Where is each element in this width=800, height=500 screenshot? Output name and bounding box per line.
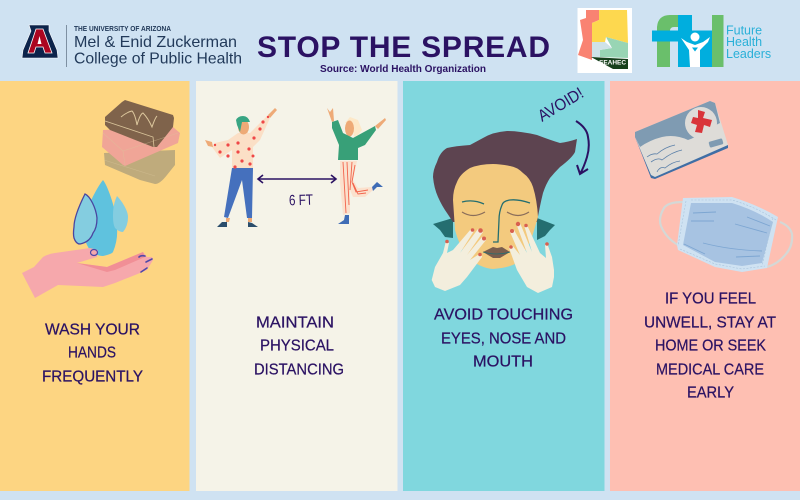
logo: seahec: SEAHEC <box>599 60 626 66</box>
icon: facial features <box>462 200 530 258</box>
icon: figure with raised arms <box>681 32 710 67</box>
text: college name: College of Public Health <box>74 50 242 68</box>
text: source: Source: World Health Organization <box>320 64 486 75</box>
panel: wash hands <box>0 81 190 491</box>
icon: health card <box>635 101 728 179</box>
arrow: six feet between people <box>258 175 336 183</box>
icon: left hand <box>432 229 486 291</box>
text: avoid touching eyes, nose and mouth: EYES, NOSE AND <box>441 330 566 348</box>
text: maintain physical distancing: DISTANCING <box>254 362 344 378</box>
text: avoid touching eyes, nose and mouth <box>434 306 573 370</box>
icon: earrings <box>433 218 555 240</box>
logo: university of arizona <box>22 25 242 68</box>
text: stay home or seek care <box>644 290 776 402</box>
icon: person in green sweater <box>327 108 386 224</box>
text: wash your hands frequently <box>42 322 143 386</box>
text: wash your hands frequently: WASH YOUR <box>45 322 140 338</box>
icon: right hand <box>509 223 554 293</box>
icon: soap bars <box>102 100 180 184</box>
text: 6 ft: 6 FT <box>289 192 313 209</box>
icon: block A <box>22 25 58 58</box>
panel: physical distancing <box>196 81 398 491</box>
text: future health leaders: Leaders <box>726 47 771 61</box>
text: stay home or seek care: EARLY <box>687 384 734 402</box>
text: wash your hands frequently: HANDS <box>68 344 116 362</box>
logo: future health leaders <box>652 15 771 67</box>
text: maintain physical distancing: PHYSICAL <box>260 338 334 354</box>
title: STOP THE SPREAD <box>257 31 550 64</box>
text: stay home or seek care: MEDICAL CARE <box>656 362 764 378</box>
arrow: avoid pointing to face <box>576 121 589 174</box>
panel: stay home or seek care <box>610 81 800 491</box>
text: maintain physical distancing: MAINTAIN <box>256 314 334 332</box>
icon: water drops <box>74 180 128 256</box>
text: avoid touching eyes, nose and mouth: MOUTH <box>473 354 533 370</box>
text: avoid callout: AVOID! <box>535 84 587 125</box>
icon: face <box>453 164 538 269</box>
icon: face mask <box>660 197 792 272</box>
text: college name: THE UNIVERSITY OF ARIZONA <box>74 26 171 33</box>
text: future health leaders <box>726 24 771 61</box>
text: avoid touching eyes, nose and mouth: AVOID TOUCHING <box>434 306 573 324</box>
icon: hair <box>433 131 577 222</box>
text: wash your hands frequently: FREQUENTLY <box>42 368 143 386</box>
icon: open hand <box>22 248 153 298</box>
text: future health leaders: Health <box>726 35 762 49</box>
text: stay home or seek care: HOME OR SEEK <box>655 338 766 354</box>
text: stay home or seek care: IF YOU FEEL <box>665 290 756 308</box>
text: college name: Mel & Enid Zuckerman <box>74 34 237 51</box>
icon: painted nails <box>445 222 549 256</box>
text: maintain physical distancing <box>254 314 344 378</box>
panel: avoid touching <box>403 81 604 491</box>
text: stay home or seek care: UNWELL, STAY AT <box>644 314 776 332</box>
text: college name <box>74 26 242 68</box>
icon: person in spotted sweater <box>205 108 277 227</box>
logo: seahec <box>578 8 632 73</box>
text: future health leaders: Future <box>726 24 762 38</box>
